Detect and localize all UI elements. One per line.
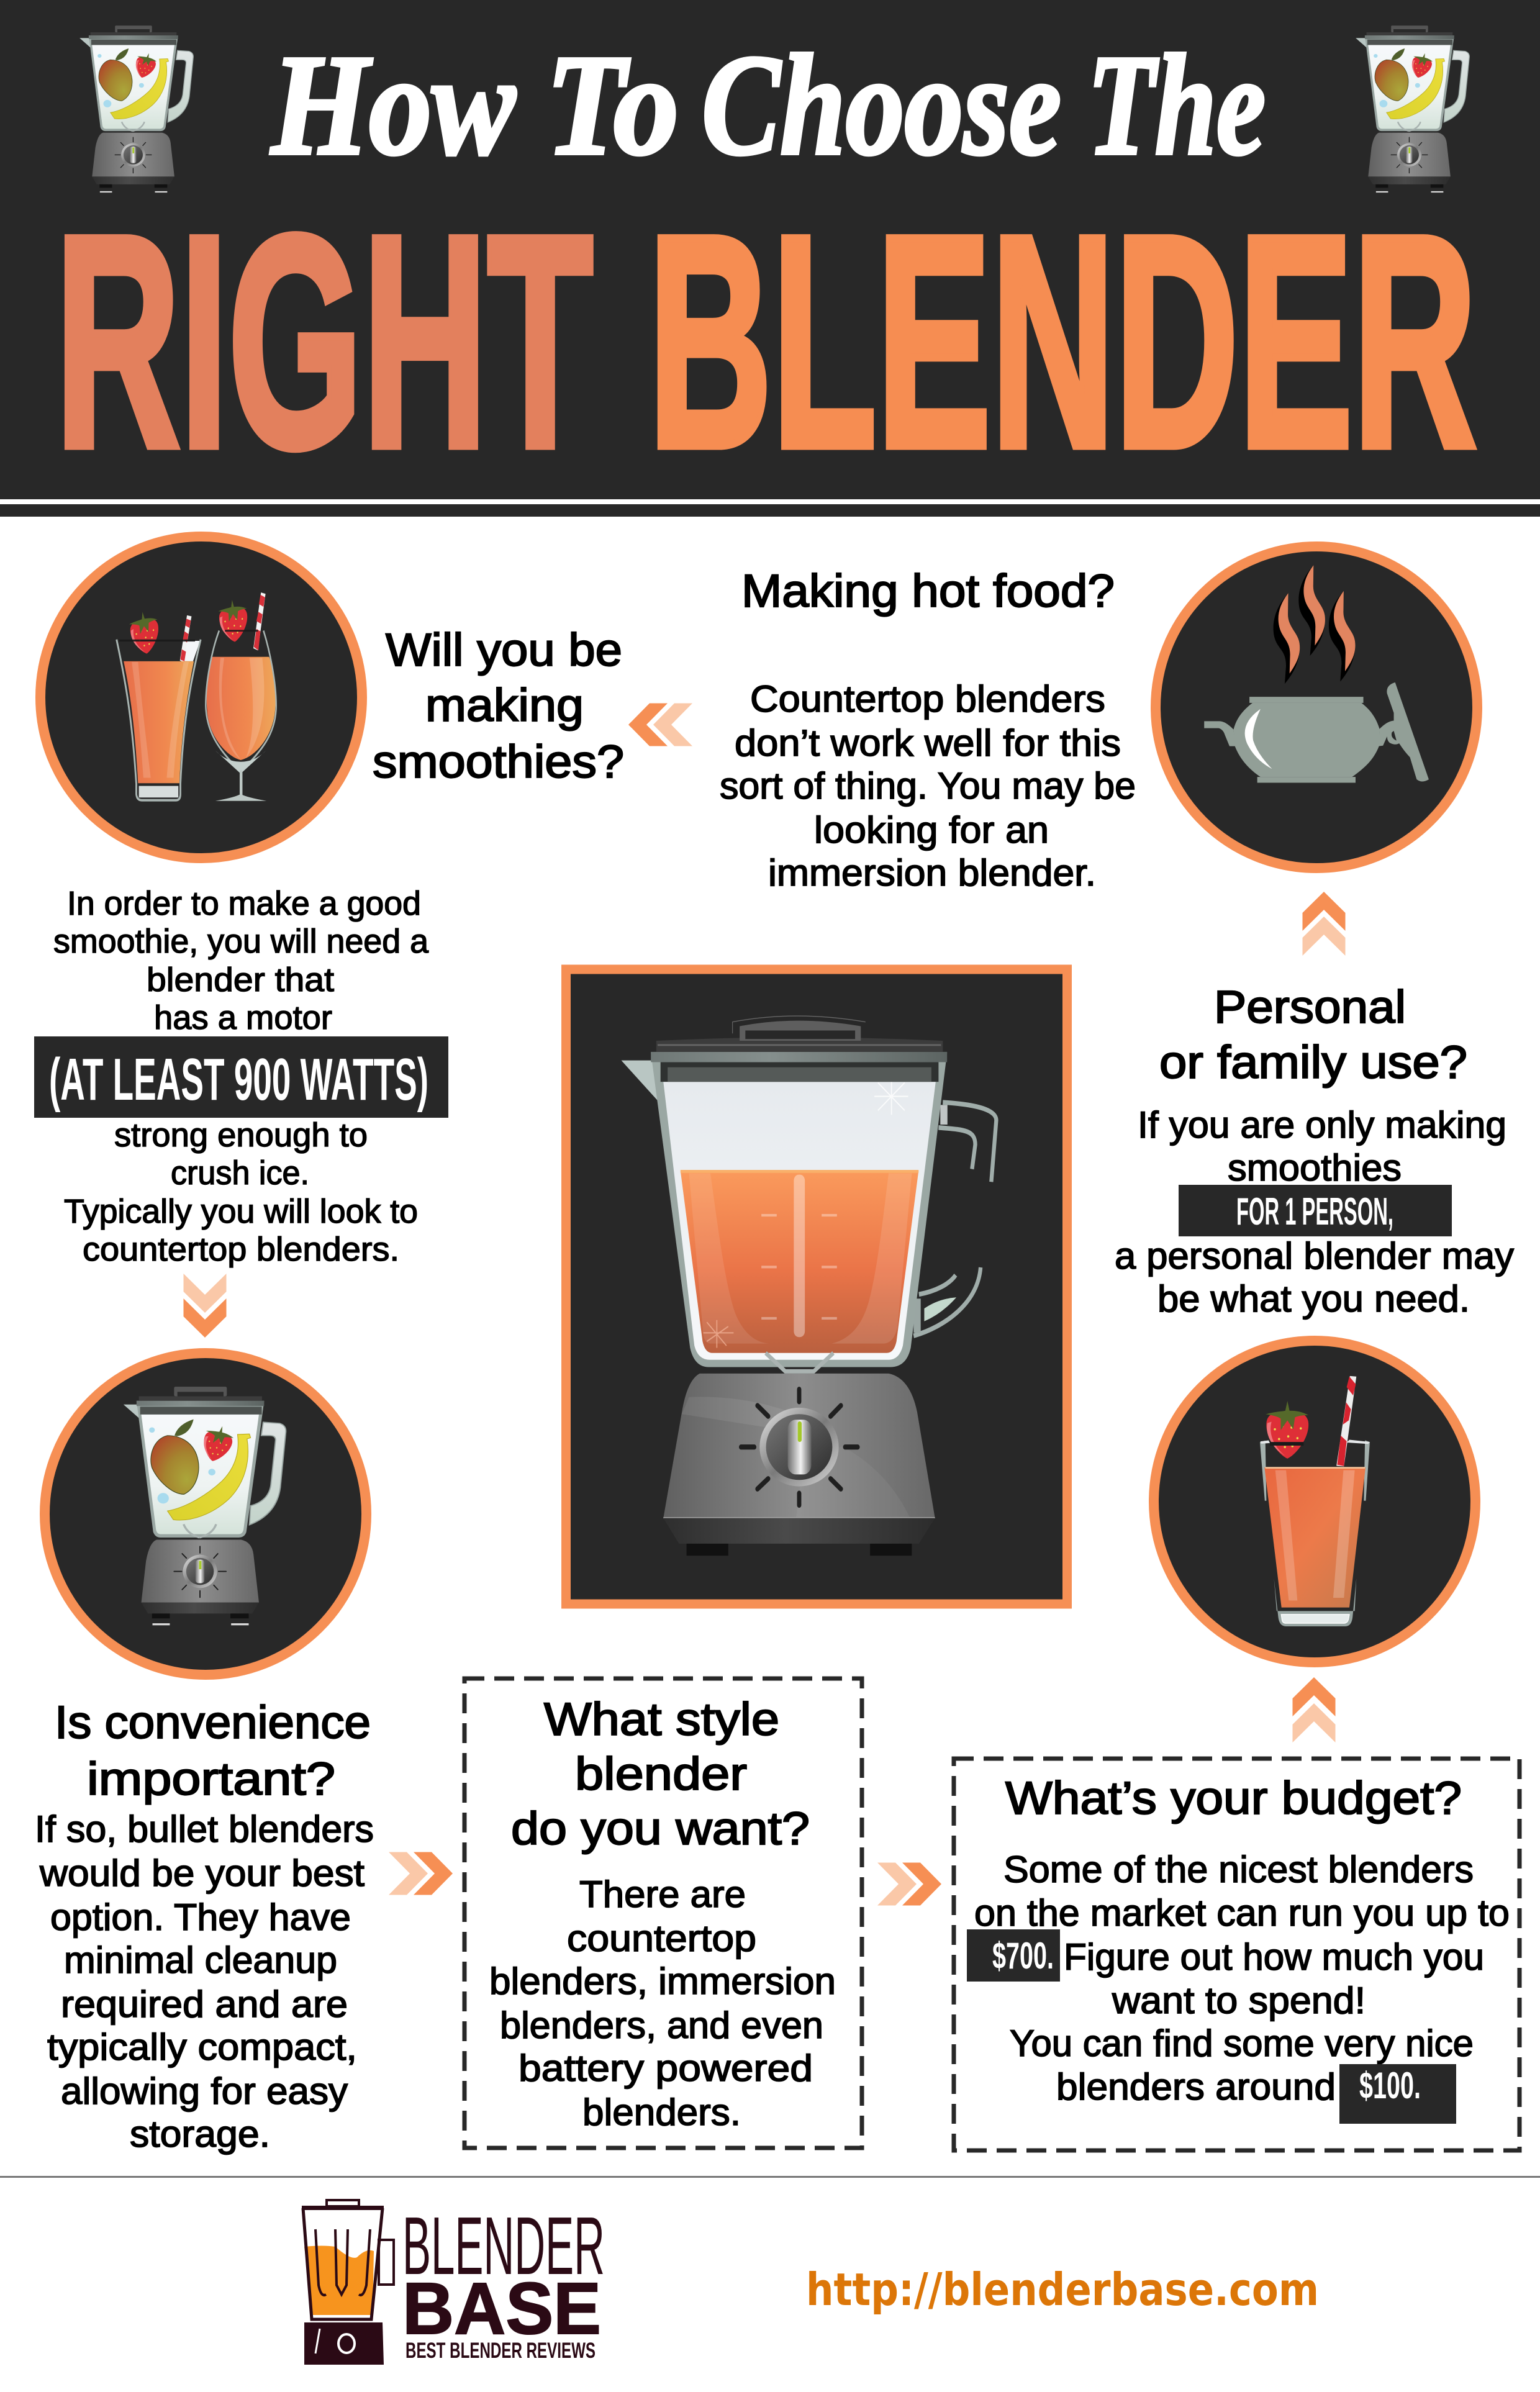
- text: smoothie advice: blender that: [147, 961, 334, 999]
- heading: will you be making smoothies: Will you be: [386, 624, 622, 676]
- heading: is convenience important: Is convenience: [55, 1697, 371, 1748]
- heading: is convenience important: [55, 1697, 371, 1805]
- title: right blender: [55, 173, 1477, 510]
- heading: will you be making smoothies: [373, 624, 624, 787]
- text: bullet blenders advice: required and are: [61, 1983, 348, 2025]
- icon: logo blender: [302, 2200, 394, 2365]
- text: smoothie advice: [53, 885, 429, 1268]
- panel: personal or family use: [1115, 981, 1514, 1320]
- logo: blender base: BLENDER: [402, 2200, 605, 2291]
- heading: personal or family use: Personal: [1214, 981, 1406, 1033]
- text: smoothie advice: crush ice.: [171, 1154, 309, 1192]
- title: how to choose the: To: [546, 25, 679, 185]
- heading: personal or family use: [1159, 981, 1467, 1088]
- heading: what style blender: do you want?: [511, 1803, 810, 1854]
- text: budget advice: You can find some very nice: [1010, 2023, 1474, 2064]
- text: smoothie advice: Typically you will look to: [64, 1193, 418, 1230]
- panel: central blender: [566, 969, 1067, 1604]
- text: personal use advice: be what you need.: [1157, 1278, 1470, 1320]
- title: right blender: RIGHT: [55, 173, 593, 510]
- panel: will you be making smoothies: [34, 537, 624, 1268]
- text: bullet blenders advice: storage.: [130, 2113, 270, 2155]
- header banner: [0, 0, 1540, 517]
- text: personal use advice: If you are only making: [1138, 1104, 1506, 1146]
- callout: $100: [1339, 2064, 1456, 2124]
- panel: making hot food: [720, 546, 1477, 894]
- text: smoothie advice: In order to make a good: [67, 885, 421, 922]
- text: bullet blenders advice: option. They have: [50, 1896, 351, 1938]
- text: blender styles: blenders, and even: [500, 2005, 823, 2046]
- heading: what's your budget: What’s your budget?: [1005, 1772, 1462, 1824]
- text: bullet blenders advice: allowing for easy: [61, 2070, 348, 2112]
- footer: [0, 2176, 1540, 2365]
- callout: for 1 person: FOR 1 PERSON,: [1236, 1190, 1393, 1233]
- text: budget advice: [974, 1849, 1510, 2108]
- heading: what style blender: What style: [544, 1693, 779, 1745]
- text: blender styles: battery powered: [519, 2047, 813, 2089]
- icon: smoothie glass circle: [1154, 1341, 1475, 1662]
- url: http://blenderbase.com: [806, 2263, 1319, 2316]
- callout: $700: [967, 1929, 1060, 1982]
- callout: at least 900 watts: [34, 1036, 448, 1118]
- title: how to choose the: The: [1087, 25, 1266, 185]
- arrow: up to making hot food: [1303, 892, 1345, 956]
- title: how to choose the: How: [270, 25, 516, 185]
- heading: personal or family use: or family use?: [1159, 1036, 1467, 1088]
- text: budget advice: Figure out how much you: [1064, 1936, 1484, 1978]
- text: bullet blenders advice: typically compact,: [47, 2026, 357, 2068]
- text: bullet blenders advice: minimal cleanup: [64, 1939, 337, 1981]
- icon: fruit blender circle: [45, 1353, 366, 1675]
- text: bullet blenders advice: would be your best: [39, 1852, 365, 1894]
- text: hot food advice: sort of thing. You may be: [720, 765, 1136, 807]
- text: hot food advice: looking for an: [814, 809, 1049, 851]
- callout: for 1 person: [1179, 1185, 1452, 1236]
- callout: at least 900 watts: (AT LEAST 900 WATTS): [49, 1046, 428, 1113]
- heading: will you be making smoothies: making: [425, 679, 584, 731]
- arrow: right from style to budget: [877, 1863, 941, 1905]
- title: how to choose the: [270, 25, 1266, 185]
- heading: what style blender: [511, 1693, 810, 1854]
- text: smoothie advice: strong enough to: [114, 1117, 368, 1154]
- icon: large blender with juice: [622, 1016, 996, 1556]
- panel: what's your budget: [954, 1759, 1520, 2150]
- text: budget advice: Some of the nicest blenders: [1003, 1849, 1474, 1890]
- text: personal use advice: a personal blender may: [1115, 1235, 1514, 1277]
- arrow: down to convenience blender: [184, 1274, 226, 1338]
- logo: blender base: BASE: [402, 2268, 601, 2350]
- text: blender styles: blenders.: [582, 2091, 741, 2133]
- text: hot food advice: Countertop blenders: [750, 678, 1105, 720]
- heading: what style blender: blender: [575, 1748, 747, 1800]
- icon: smoothie glasses circle: [40, 537, 362, 858]
- panel: what style blender: [464, 1678, 862, 2148]
- arrow: left from making hot food to smoothies: [628, 703, 692, 746]
- text: budget advice: on the market can run you up to: [974, 1892, 1510, 1934]
- text: hot food advice: [720, 678, 1136, 894]
- icon: steaming pot circle: [1156, 546, 1477, 868]
- text: personal use advice: [1115, 1104, 1514, 1320]
- panel: is convenience important: [35, 1697, 374, 2155]
- heading: is convenience important: important?: [87, 1753, 335, 1805]
- text: blender styles: There are: [579, 1873, 746, 1915]
- logo: blender base: BEST BLENDER REVIEWS: [405, 2339, 596, 2363]
- text: smoothie advice: countertop blenders.: [83, 1231, 399, 1268]
- text: hot food advice: immersion blender.: [768, 852, 1096, 894]
- text: blender styles: blenders, immersion: [489, 1960, 836, 2002]
- text: bullet blenders advice: If so, bullet blenders: [35, 1808, 374, 1850]
- title: how to choose the: Choose: [702, 25, 1061, 185]
- text: budget advice: want to spend!: [1112, 1980, 1366, 2021]
- icon: header blender right: [1356, 25, 1469, 193]
- heading: will you be making smoothies: smoothies?: [373, 736, 624, 787]
- text: personal use advice: smoothies: [1228, 1147, 1402, 1189]
- heading: making hot food: Making hot food?: [741, 565, 1115, 617]
- text: hot food advice: don’t work well for this: [735, 722, 1121, 764]
- arrow: up to smoothie glass: [1293, 1677, 1335, 1742]
- text: bullet blenders advice: [35, 1808, 374, 2155]
- text: smoothie advice: has a motor: [154, 999, 332, 1036]
- logo: blender base: [302, 2200, 605, 2365]
- callout: $100: $100.: [1359, 2065, 1421, 2106]
- text: blender styles: countertop: [567, 1918, 756, 1959]
- text: smoothie advice: smoothie, you will need a: [53, 923, 429, 960]
- text: blender styles: [489, 1873, 836, 2133]
- text: budget advice: blenders around: [1056, 2066, 1336, 2108]
- arrow: right from convenience to style: [389, 1852, 453, 1895]
- icon: header blender left: [79, 25, 193, 193]
- callout: $700: $700.: [992, 1935, 1054, 1977]
